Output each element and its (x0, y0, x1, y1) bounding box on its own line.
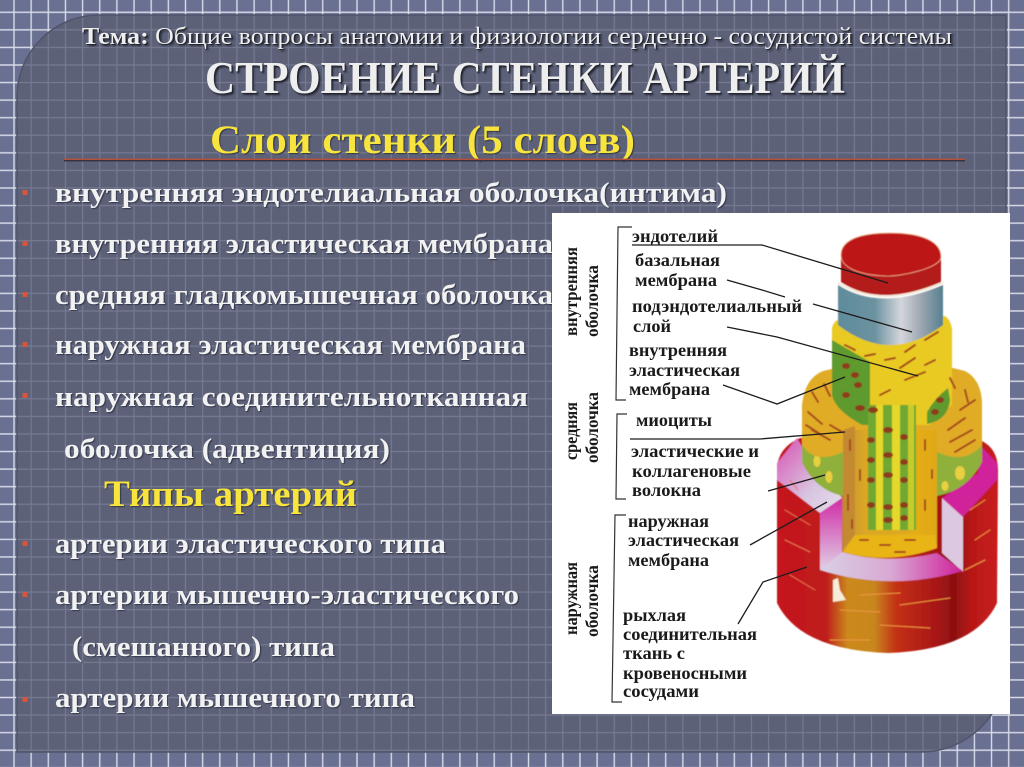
bullet item 3: средняя гладкомышечная оболочка (55, 280, 553, 311)
list: wall layers (22, 178, 727, 465)
vertical group labels: оболочка (582, 392, 602, 463)
diagram labels: слой (633, 316, 671, 336)
outer layer: red cylinder (777, 438, 998, 653)
divider line (64, 159, 965, 161)
list: artery types (22, 529, 519, 714)
brown ovals on rods (842, 363, 944, 523)
diagram labels: мембрана (628, 550, 709, 570)
bullet item 5: наружная соединительнотканная (55, 382, 528, 413)
diagram labels: ткань с (623, 643, 685, 663)
diagram labels: мембрана (635, 270, 717, 290)
diagram labels: базальная (635, 250, 720, 270)
vertical group labels: оболочка (582, 265, 602, 337)
diagram labels: наружная (628, 511, 709, 531)
brackets (612, 227, 632, 702)
highlight patch on cylinder (833, 578, 846, 602)
diagram labels: подэндотелиальный (632, 296, 802, 316)
diagram labels: коллагеновые (632, 461, 751, 481)
middle layer: green fibre ring (802, 440, 982, 496)
bullet item 5 (22, 382, 528, 465)
bullet item 5: оболочка (адвентиция) (64, 434, 390, 465)
red inner cylinder (838, 233, 944, 297)
diagram labels: кровеносными (623, 663, 747, 683)
middle layer: yellow cylinder (802, 366, 982, 457)
vertical group labels: средняя (561, 402, 581, 460)
inner layer: yellow cylinder (832, 316, 952, 425)
title: СТРОЕНИЕ СТЕНКИ АРТЕРИЙ (205, 53, 845, 103)
diagram labels: рыхлая (623, 605, 686, 625)
diagram labels: внутренняя (629, 340, 727, 360)
bullet type 3: артерии мышечного типа (55, 683, 415, 714)
heading: wall layers: Слои стенки (5 слоев) (210, 117, 635, 162)
diagram labels: эластическая (629, 360, 740, 380)
vertical group labels: внутренняя (561, 247, 581, 336)
outer elastic membrane: pink cut faces (777, 438, 997, 581)
vertical group labels: оболочка (582, 565, 602, 637)
brown striations (785, 332, 990, 640)
diagram labels: мембрана (629, 379, 710, 399)
diagram labels (623, 226, 802, 701)
diagram labels: сосудами (623, 681, 699, 701)
bullet item 4: наружная эластическая мембрана (55, 330, 526, 361)
diagram labels: волокна (632, 480, 701, 500)
heading: artery types: Типы артерий (104, 474, 357, 515)
artery illustration (777, 233, 998, 653)
bullet type 2: артерии мышечно-эластического (55, 580, 519, 611)
bullet type 2 (22, 580, 519, 663)
diagram labels: эластические и (631, 441, 759, 461)
leader lines (630, 245, 918, 624)
diagram labels: соединительная (623, 624, 757, 644)
diagram labels: эластическая (628, 530, 739, 550)
bullet item 2: внутренняя эластическая мембрана (55, 229, 553, 260)
figure: artery wall diagram (552, 213, 1010, 714)
central column with floor (843, 426, 937, 558)
vertical group labels (561, 247, 602, 637)
bullet item 1: внутренняя эндотелиальная оболочка(интима) (55, 178, 727, 209)
topic line: Тема: Общие вопросы анатомии и физиологии сердечно - сосудистой системы (82, 24, 952, 50)
bullet type 2: (смешанного) типа (72, 632, 335, 663)
vertical group labels: наружная (561, 562, 581, 635)
diagram labels: эндотелий (632, 226, 718, 246)
diagram labels: миоциты (636, 410, 712, 430)
inner elastic membrane: green rods (832, 340, 950, 534)
grey cylinder (838, 285, 943, 345)
bullet type 1: артерии эластического типа (55, 529, 446, 560)
